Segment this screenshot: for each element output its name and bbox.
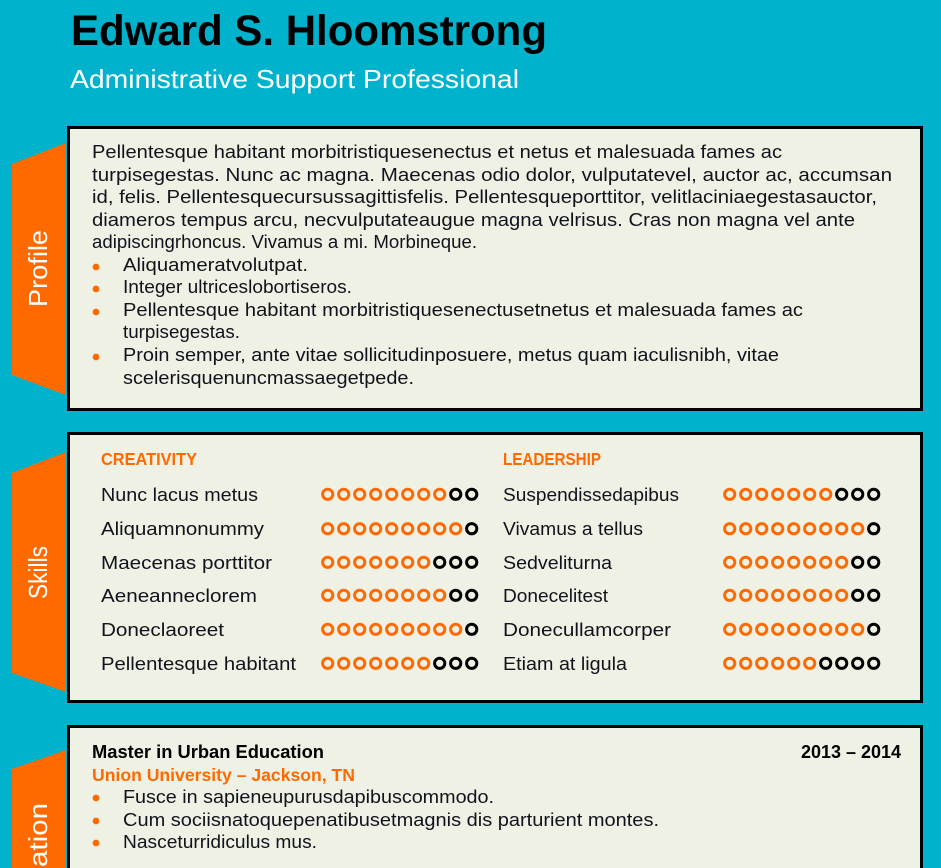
profile bullet list: Integer ultriceslobortiseros. (123, 277, 352, 297)
panel: skills (12, 434, 922, 702)
education bullet list: Nasceturridiculus mus. (123, 832, 317, 852)
education card (68, 726, 922, 868)
profile paragraph: turpisegestas. Nunc ac magna. Maecenas odio dolor, vulputatevel, auctor ac, accumsan (92, 165, 892, 185)
tab label: profile: Profile (23, 230, 53, 307)
skill labels: creativity: Maecenas porttitor (101, 552, 272, 573)
skill labels: creativity: Aeneanneclorem (101, 585, 257, 606)
skill labels: creativity: Pellentesque habitant (101, 653, 296, 674)
tab: education (12, 750, 66, 868)
skills card (68, 434, 922, 702)
education bullet list (93, 787, 659, 852)
skill labels: leadership: Sedveliturna (503, 552, 613, 573)
profile bullet list: Proin semper, ante vitae sollicitudinposuere, metus quam iaculisnibh, vitae (123, 345, 779, 365)
panel: profile (12, 128, 922, 410)
profile bullet list: turpisegestas. (123, 322, 240, 342)
skill labels: leadership: Donecullamcorper (503, 619, 671, 640)
rating dots: creativity (323, 489, 477, 668)
panel: education (12, 726, 922, 868)
profile paragraph: id, felis. Pellentesquecursussagittisfelis. Pellentesqueporttitor, velitlaciniaegestasauctor, (92, 187, 877, 207)
profile paragraph (92, 142, 892, 252)
heading: creativity: CREATIVITY (101, 449, 197, 469)
skill labels: creativity: Doneclaoreet (101, 619, 224, 640)
profile bullet list (93, 255, 803, 388)
tab: profile (12, 143, 66, 395)
rating dots: leadership (725, 489, 879, 668)
skill labels: creativity: Aliquamnonummy (101, 518, 265, 539)
profile bullet list: scelerisquenuncmassaegetpede. (123, 368, 414, 388)
heading: leadership: LEADERSHIP (503, 449, 601, 469)
skill labels: leadership: Etiam at ligula (503, 653, 628, 674)
profile card (68, 128, 922, 410)
education bullet list: Cum sociisnatoquepenatibusetmagnis dis parturient montes. (123, 810, 659, 830)
skill labels: leadership: Donecelitest (503, 585, 608, 606)
skill labels: creativity: Nunc lacus metus (101, 484, 258, 505)
skills column: creativity (101, 449, 477, 674)
education bullet list: Fusce in sapieneupurusdapibuscommodo. (123, 787, 494, 807)
skill labels: leadership: Suspendissedapibus (503, 484, 679, 505)
tab label: education (cropped by the page edge, as in the reference): ation (23, 803, 53, 867)
skill labels: leadership (503, 484, 679, 674)
profile paragraph: Pellentesque habitant morbitristiquesenectus et netus et malesuada fames ac (92, 142, 782, 162)
profile paragraph: diameros tempus arcu, necvulputateaugue magna velrisus. Cras non magna vel ante (92, 210, 855, 230)
subtitle: Administrative Support Professional (70, 64, 519, 94)
university: Union University – Jackson, TN (92, 765, 355, 785)
degree dates: 2013 – 2014 (801, 742, 901, 762)
profile paragraph: adipiscingrhoncus. Vivamus a mi. Morbineque. (92, 232, 477, 252)
title: Edward S. Hloomstrong (71, 7, 547, 55)
skill labels: creativity (101, 484, 296, 674)
skill labels: leadership: Vivamus a tellus (503, 518, 643, 539)
profile bullet list: Aliquameratvolutpat. (123, 255, 308, 275)
tab: skills (12, 452, 66, 692)
skills column: leadership (503, 449, 879, 674)
tab label: skills: Skills (23, 546, 53, 599)
degree title: Master in Urban Education (92, 742, 324, 762)
profile bullet list: Pellentesque habitant morbitristiquesenectusetnetus et malesuada fames ac (123, 300, 803, 320)
